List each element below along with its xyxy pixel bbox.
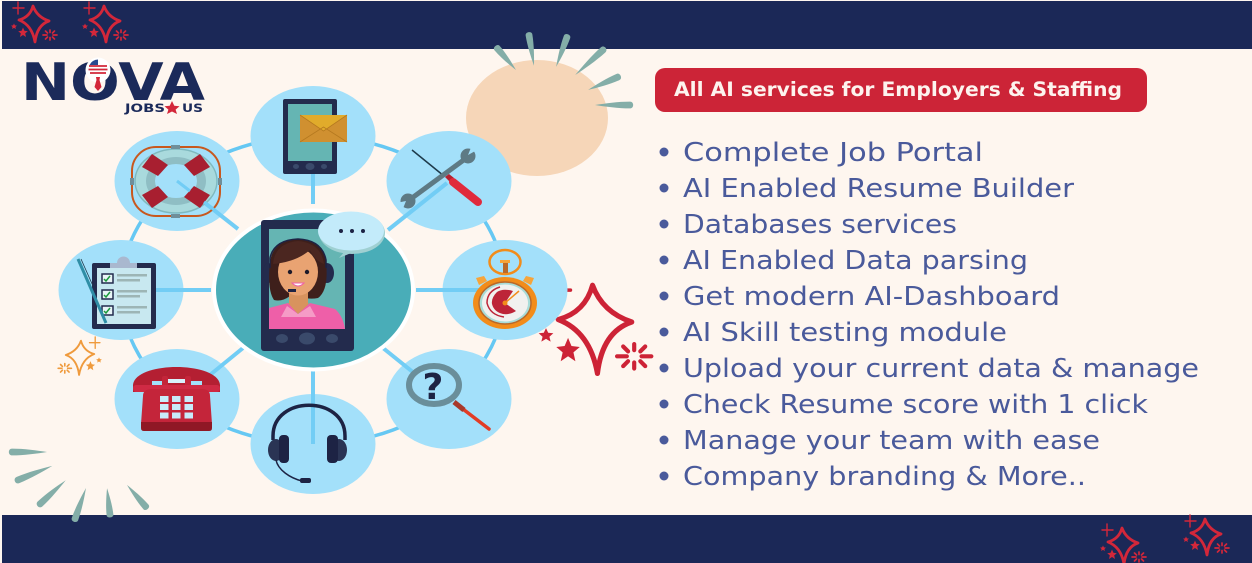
icon: stopwatch <box>473 250 537 329</box>
bubble: clipboard <box>58 240 184 340</box>
logo <box>21 53 205 115</box>
top navy bar <box>2 1 1252 49</box>
services list <box>660 138 1199 492</box>
heading pill <box>655 68 1147 112</box>
icon: wrench and screwdriver <box>396 145 478 211</box>
center circle <box>212 208 415 372</box>
list item 4: AI Enabled Data parsing <box>683 246 1028 276</box>
icon: lifebuoy <box>130 145 222 218</box>
bubble: headset <box>250 394 376 494</box>
icon: clipboard and pen <box>78 256 156 329</box>
agent tablet <box>261 220 354 351</box>
icon: headset <box>268 405 347 483</box>
icon: magnifier <box>409 366 489 429</box>
speech bubble <box>318 212 385 258</box>
logo wordmark: NOVA <box>21 53 205 113</box>
connector ring <box>121 136 505 444</box>
icon: tablet with envelope <box>283 99 347 174</box>
bubble: telephone <box>114 349 240 449</box>
bubble: tools <box>386 131 512 231</box>
bubble: mail <box>250 86 376 186</box>
top bar sparkles <box>11 2 128 42</box>
agent woman <box>263 239 345 329</box>
spokes <box>150 170 480 444</box>
icon: telephone <box>133 367 220 431</box>
bubble: magnifier <box>386 349 512 449</box>
list item 2: AI Enabled Resume Builder <box>683 174 1074 204</box>
list item 10: Company branding & More.. <box>683 462 1086 492</box>
big red sparkle <box>539 275 651 373</box>
bottom left rays <box>9 449 150 523</box>
logo star <box>164 101 180 114</box>
bubble: stopwatch <box>442 240 568 340</box>
orange sparkle <box>58 337 102 375</box>
list item 1: Complete Job Portal <box>683 138 983 168</box>
bottom bar sparkles <box>1100 515 1229 563</box>
list item 8: Check Resume score with 1 click <box>683 390 1148 420</box>
top right rays <box>493 32 633 108</box>
list item 3: Databases services <box>683 210 957 240</box>
question mark: ? <box>423 367 443 408</box>
logo flag badge <box>86 58 110 91</box>
logo subtitle end: US <box>182 101 203 115</box>
list item 7: Upload your current data & manage <box>683 354 1199 384</box>
bottom navy bar <box>2 515 1252 563</box>
list item 9: Manage your team with ease <box>683 426 1100 456</box>
heading text: All AI services for Employers & Staffing <box>674 78 1122 101</box>
list item 5: Get modern AI-Dashboard <box>683 282 1060 312</box>
bubble: lifebuoy <box>114 131 240 231</box>
list item 6: AI Skill testing module <box>683 318 1007 348</box>
logo subtitle: JOBS <box>124 101 165 115</box>
peach circle <box>466 60 608 176</box>
